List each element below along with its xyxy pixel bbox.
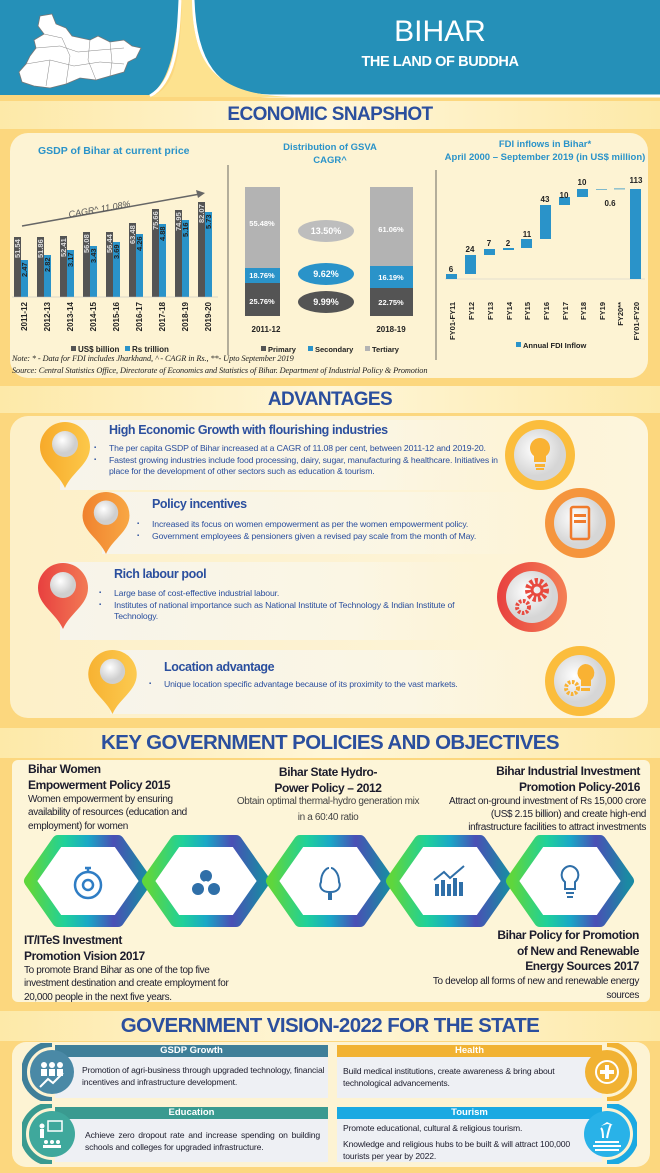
chart: GSDP bar chart: 2014-15 xyxy=(89,301,98,331)
card: GSDP growth xyxy=(22,1043,328,1101)
advantage 1 xyxy=(40,420,498,490)
chart: GSDP bar chart: 2017-18 xyxy=(158,301,167,331)
chart: GSDP bar chart: 2.82 xyxy=(43,257,52,272)
chart: GSDP bar chart: 51.86 xyxy=(36,239,45,258)
chart: GSDP bar chart: 4.26 xyxy=(135,236,144,251)
advantage 3: Large base of cost-effective industrial labour. xyxy=(114,588,279,598)
chart: FDI inflows waterfall: 10 xyxy=(560,191,569,200)
chart: FDI inflows waterfall: FY16 xyxy=(542,302,551,320)
chart: GSVA distribution: 16.19% xyxy=(378,273,404,282)
chart: GSDP bar chart: 82.07 xyxy=(197,204,206,223)
heading: key government policies: KEY GOVERNMENT POLICIES AND OBJECTIVES xyxy=(101,731,559,754)
card: health: Build medical institutions, create awareness & bring about technological advancements. xyxy=(343,1066,555,1088)
chart: GSDP bar chart: 3.43 xyxy=(89,248,98,263)
card: GSDP growth: GSDP Growth xyxy=(160,1045,223,1056)
chart: GSDP bar chart: CAGR^ 11.08% xyxy=(68,199,131,219)
chart: FDI inflows waterfall: 43 xyxy=(541,195,550,204)
policy: women empowerment: Women empowerment by ensuring availability of resources (education and employment) for women xyxy=(28,794,187,832)
heading: economic snapshot: ECONOMIC SNAPSHOT xyxy=(227,104,433,125)
policy: hydro power xyxy=(237,765,420,823)
notes xyxy=(12,354,428,375)
chart: GSDP bar chart: 74.95 xyxy=(174,212,183,231)
icon: island xyxy=(584,1104,637,1164)
card: education: Education xyxy=(169,1107,214,1118)
icon: gear and bulb circle xyxy=(545,646,615,716)
chart: FDI inflows waterfall: 24 xyxy=(466,245,475,254)
card: tourism: Knowledge and religious hubs to be built & will attract 100,000 tourists per year by 2022. xyxy=(343,1138,570,1161)
icon: pin xyxy=(40,422,90,488)
policy: IT/ITeS: IT/ITeS Investment xyxy=(24,933,122,947)
card: tourism: Tourism xyxy=(451,1107,488,1118)
icon: lightbulb circle xyxy=(505,420,575,490)
icon: gears circle xyxy=(497,562,567,632)
chart: FDI inflows waterfall: FDI inflows in Bihar* xyxy=(499,139,591,150)
chart: FDI inflows waterfall: FY18 xyxy=(579,302,588,320)
chart: GSDP bar chart: 5.73 xyxy=(204,214,213,229)
chart: FDI inflows waterfall: 0.6 xyxy=(604,199,616,208)
chart: GSVA distribution: Tertiary xyxy=(372,345,400,354)
icon: pin xyxy=(82,492,130,554)
chart: GSVA distribution: 2018-19 xyxy=(376,325,406,334)
advantage 3: Rich labour pool xyxy=(114,567,206,581)
chart: GSDP bar chart: 2011-12 xyxy=(20,301,29,331)
chart: GSDP bar chart: GSDP of Bihar at current price xyxy=(38,145,190,157)
chart: GSDP bar chart: 3.17 xyxy=(66,252,75,267)
chart: FDI inflows waterfall: FY01-FY11 xyxy=(448,302,457,340)
advantage 3: Institutes of national importance such as National Institute of Technology & Indian Institute of Technology. xyxy=(114,600,454,621)
advantage 2: Government employees & pensioners given a revised pay scale from the month of May. xyxy=(152,531,476,541)
heading: government vision xyxy=(0,1011,660,1041)
icon: medical cross xyxy=(585,1043,637,1101)
heading: government vision: GOVERNMENT VISION-2022 FOR THE STATE xyxy=(121,1014,539,1037)
icon: speech bubbles xyxy=(192,870,220,895)
chart: FDI inflows waterfall: 10 xyxy=(578,178,587,187)
heading: advantages: ADVANTAGES xyxy=(268,389,392,410)
chart: FDI inflows waterfall: FY13 xyxy=(486,302,495,320)
policy: women empowerment xyxy=(28,762,187,832)
chart: GSDP bar chart: 2015-16 xyxy=(112,301,121,331)
panel: vision xyxy=(12,1042,650,1167)
chart: GSDP bar chart: 2012-13 xyxy=(43,301,52,331)
icon: bar chart xyxy=(434,866,464,896)
chart: GSVA distribution: Primary xyxy=(268,345,297,354)
chart: GSVA distribution: Secondary xyxy=(315,345,354,354)
chart: FDI inflows waterfall: FY17 xyxy=(561,302,570,320)
icon: bulb xyxy=(562,866,578,897)
hexagon chain xyxy=(24,835,634,927)
icon: tablet circle xyxy=(545,488,615,558)
chart: FDI inflows waterfall: FY15 xyxy=(523,302,532,320)
chart: FDI inflows waterfall: FY14 xyxy=(505,301,514,320)
subtitle: THE LAND OF BUDDHA xyxy=(361,54,519,70)
notes: Note: * - Data for FDI includes Jharkhand, ^ - CAGR in Rs., **- Upto September 2019 xyxy=(12,354,294,363)
chart: GSDP bar chart: 2.47 xyxy=(20,262,29,277)
policy: industrial investment: Promotion Policy-2016 xyxy=(519,780,640,794)
icon: teacher xyxy=(22,1104,75,1164)
header xyxy=(0,0,660,98)
card: tourism: Promote educational, cultural & religious tourism. xyxy=(343,1123,522,1133)
card: GSDP growth: Promotion of agri-business through upgraded technology, financial incentives and infrastructure development. xyxy=(82,1065,324,1087)
panel: key policies xyxy=(12,760,650,1002)
chart: GSVA distribution xyxy=(245,142,413,354)
chart: GSDP bar chart: 52.41 xyxy=(59,238,68,257)
icon: pin xyxy=(88,650,137,714)
advantage 4 xyxy=(88,650,464,714)
advantage 3 xyxy=(38,562,455,640)
chart: GSVA distribution: 9.62% xyxy=(313,269,339,279)
chart: GSVA distribution: CAGR^ xyxy=(313,155,347,166)
card: education: Achieve zero dropout rate and increase spending on building schools and colleges for upgraded infrastructure. xyxy=(85,1130,320,1152)
advantage 2: Policy incentives xyxy=(152,497,247,511)
heading: key government policies xyxy=(0,728,660,758)
title: BIHAR: BIHAR xyxy=(394,15,486,48)
chart: GSDP bar chart: 3.69 xyxy=(112,244,121,259)
chart: GSDP bar chart: 2016-17 xyxy=(135,301,144,331)
advantage 4: Location advantage xyxy=(164,660,274,674)
chart: FDI inflows waterfall: April 2000 – September 2019 (in US$ million) xyxy=(445,152,645,163)
policy: hydro power: Power Policy – 2012 xyxy=(274,781,382,795)
icon: pin xyxy=(38,563,88,629)
card: education xyxy=(22,1104,328,1164)
chart: FDI inflows waterfall xyxy=(444,139,645,350)
chart: FDI inflows waterfall: 2 xyxy=(506,239,511,248)
chart: GSDP bar chart: US$ billion xyxy=(78,345,119,354)
card: health xyxy=(337,1043,637,1101)
chart: FDI inflows waterfall: FY19 xyxy=(598,302,607,320)
chart: FDI inflows waterfall: 11 xyxy=(523,230,532,239)
policy: renewable energy: Bihar Policy for Promotion xyxy=(497,928,639,942)
chart: GSVA distribution: 22.75% xyxy=(378,298,404,307)
policy: IT/ITeS: To promote Brand Bihar as one of the top five investment destination and create employment for 20,000 people in the next five years. xyxy=(24,965,228,1003)
advantage 1: The per capita GSDP of Bihar increased at a CAGR of 11.08 per cent, between 2011-12 and 2019-20. xyxy=(109,443,486,453)
chart: GSVA distribution: 61.06% xyxy=(378,225,404,234)
chart: GSVA distribution: 2011-12 xyxy=(252,325,281,334)
heading: economic snapshot xyxy=(0,101,660,129)
panel: advantages xyxy=(10,416,648,718)
chart: GSDP bar chart: 2018-19 xyxy=(181,301,190,331)
policy: IT/ITeS: Promotion Vision 2017 xyxy=(24,948,145,962)
card: tourism xyxy=(337,1104,637,1164)
policy: renewable energy: Energy Sources 2017 xyxy=(525,959,639,973)
panel: economic snapshot xyxy=(10,133,648,378)
icon: two heads xyxy=(320,868,340,900)
advantage 2: Increased its focus on women empowerment as per the women empowerment policy. xyxy=(152,519,468,529)
advantage 1: High Economic Growth with flourishing industries xyxy=(109,423,388,437)
chart: GSDP bar chart: 4.88 xyxy=(158,226,167,241)
chart: GSDP bar chart: 51.54 xyxy=(13,238,22,258)
chart: GSVA distribution: 13.50% xyxy=(311,226,341,236)
chart: FDI inflows waterfall: 113 xyxy=(630,176,643,185)
policy: industrial investment: Attract on-ground investment of Rs 15,000 crore (US$ 2.15 billion) and create high-end infrastructure facilities to attract investments xyxy=(449,796,646,833)
chart: GSDP bar chart: Rs trillion xyxy=(132,345,169,354)
icon: bihar map xyxy=(19,14,141,88)
chart: FDI inflows waterfall: FY12 xyxy=(467,302,476,320)
policy: IT/ITeS xyxy=(24,933,229,1003)
chart: GSDP bar chart: 56.08 xyxy=(82,234,91,253)
chart: FDI inflows waterfall: FY01-FY20 xyxy=(632,302,641,340)
chart: GSDP bar chart: 75.66 xyxy=(151,211,160,230)
chart: GSDP bar chart xyxy=(12,145,436,360)
policy: renewable energy xyxy=(433,928,640,1000)
policy: hydro power: Obtain optimal thermal-hydro generation mix in a 60:40 ratio xyxy=(237,796,419,823)
advantage 2 xyxy=(82,492,476,554)
chart: FDI inflows waterfall: Annual FDI Inflow xyxy=(523,341,586,350)
icon: stopwatch gear xyxy=(75,868,101,898)
policy: renewable energy: of New and Renewable xyxy=(517,944,639,958)
policy: renewable energy: To develop all forms of new and renewable energy sources xyxy=(433,976,639,1000)
chart: FDI inflows waterfall: 6 xyxy=(449,265,454,274)
heading: advantages xyxy=(0,386,660,413)
policy: hydro power: Bihar State Hydro- xyxy=(279,765,377,779)
chart: GSVA distribution: 25.76% xyxy=(249,297,275,306)
policy: women empowerment: Bihar Women xyxy=(28,762,101,776)
chart: GSDP bar chart: 63.48 xyxy=(128,225,137,244)
chart: GSDP bar chart: 5.16 xyxy=(181,222,190,237)
policy: women empowerment: Empowerment Policy 2015 xyxy=(28,778,170,792)
chart: GSDP bar chart: 56.44 xyxy=(105,233,114,253)
chart: GSDP bar chart: 2019-20 xyxy=(204,301,213,331)
chart: FDI inflows waterfall: 7 xyxy=(487,239,492,248)
policy: industrial investment: Bihar Industrial Investment xyxy=(496,764,640,778)
chart: GSDP bar chart: 2013-14 xyxy=(66,301,75,331)
advantage 1: Fastest growing industries include food processing, dairy, sugar, manufacturing & healthcare. Initiatives in place for the development of other sectors such as education & tourism. xyxy=(109,455,498,476)
chart: GSVA distribution: 55.48% xyxy=(249,219,275,228)
chart: GSVA distribution: 9.99% xyxy=(313,297,339,307)
icon: growth people xyxy=(22,1043,74,1101)
advantage 4: Unique location specific advantage because of its proximity to the vast markets. xyxy=(164,679,458,689)
policy: industrial investment xyxy=(449,764,646,833)
notes: Source: Central Statistics Office, Directorate of Economics and Statistics of Bihar. Department of Industrial Policy & Promotion xyxy=(12,366,427,374)
chart: GSVA distribution: 18.76% xyxy=(249,271,275,280)
card: health: Health xyxy=(455,1045,484,1056)
chart: FDI inflows waterfall: FY20** xyxy=(616,302,625,326)
chart: GSVA distribution: Distribution of GSVA xyxy=(283,142,377,153)
